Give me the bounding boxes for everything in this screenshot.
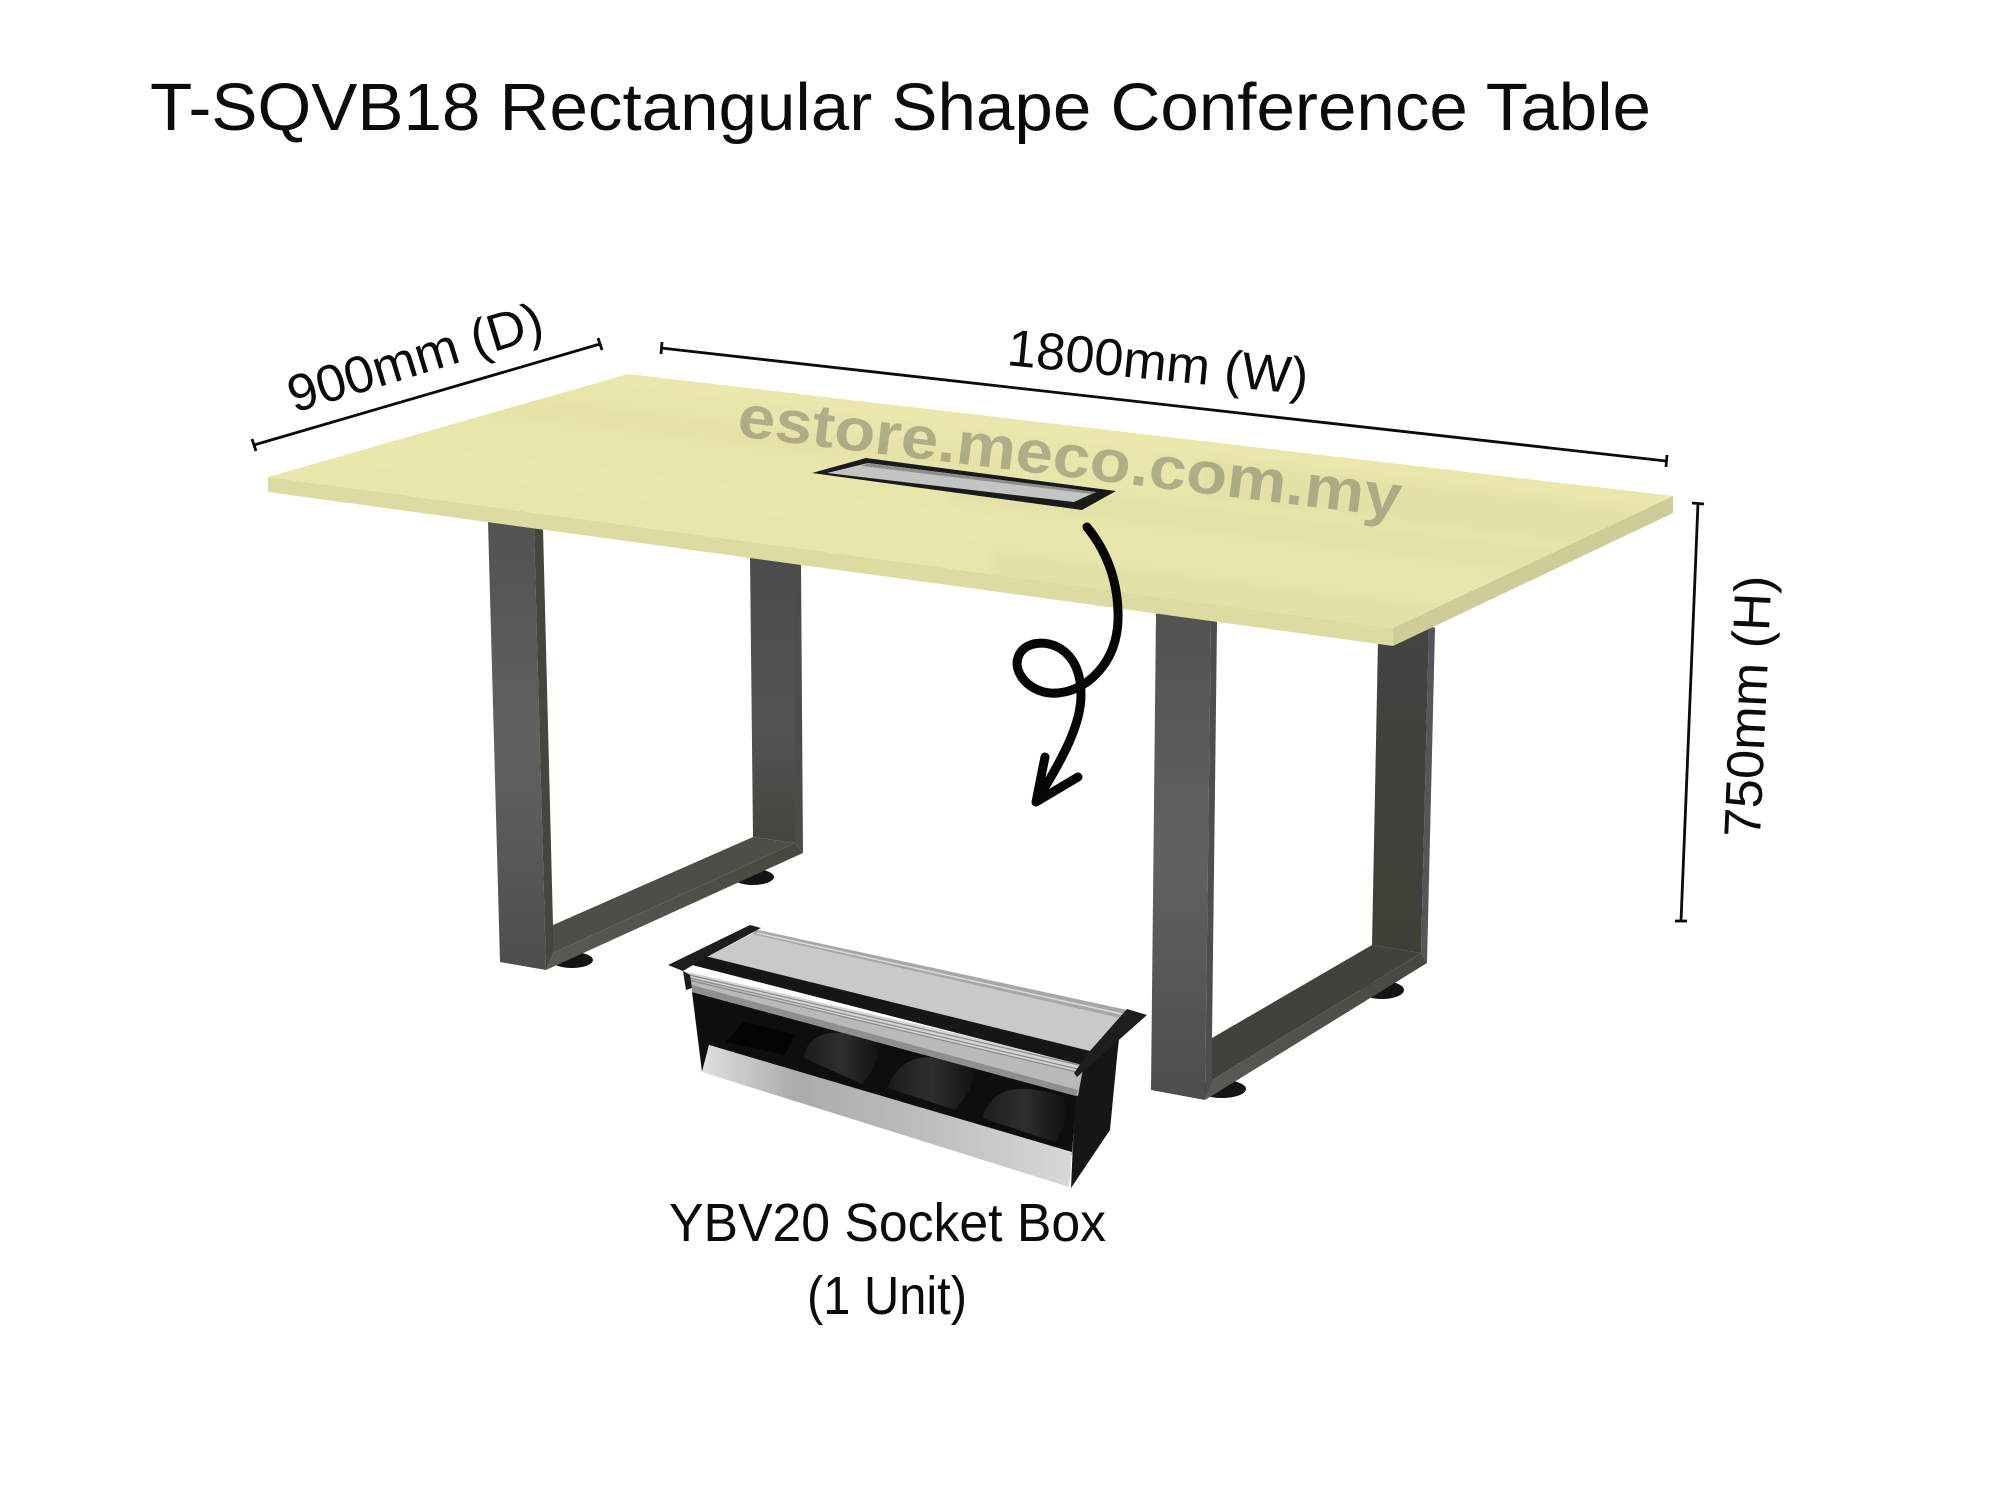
right table leg — [1151, 613, 1435, 1100]
arrow: socket box drops from the table — [1017, 527, 1118, 802]
cable scoops — [726, 1022, 1066, 1142]
width label: 1800mm (W) — [1005, 319, 1311, 406]
front rail — [683, 971, 1084, 1096]
dimension line: depth — [252, 338, 602, 451]
table top — [268, 374, 1673, 646]
ventilated black slot — [692, 956, 1090, 1066]
right side panel — [1071, 1039, 1119, 1188]
title: T-SQVB18 Rectangular Shape Conference Table — [150, 70, 1651, 145]
label line 2: (1 Unit) — [807, 1266, 967, 1326]
socket box product — [668, 925, 1147, 1188]
left table leg — [488, 522, 803, 970]
height label: 750mm (H) — [1714, 574, 1783, 839]
right flange — [1074, 1009, 1147, 1077]
socket box inlay on table top — [812, 458, 1116, 510]
top plate — [705, 930, 1127, 1053]
lower steel panel — [702, 1045, 1072, 1187]
dimension line: height — [1675, 503, 1704, 921]
depth label: 900mm (D) — [281, 292, 550, 424]
back rail — [752, 930, 1127, 1018]
label line 1: YBV20 Socket Box — [669, 1193, 1106, 1253]
dimension line: width — [661, 342, 1667, 467]
watermark: estore.meco.com.my — [734, 382, 1406, 530]
infographic canvas — [152, 82, 1782, 1325]
socket box label — [669, 1193, 1106, 1326]
dark interior — [692, 992, 1076, 1155]
left flange — [668, 925, 761, 971]
